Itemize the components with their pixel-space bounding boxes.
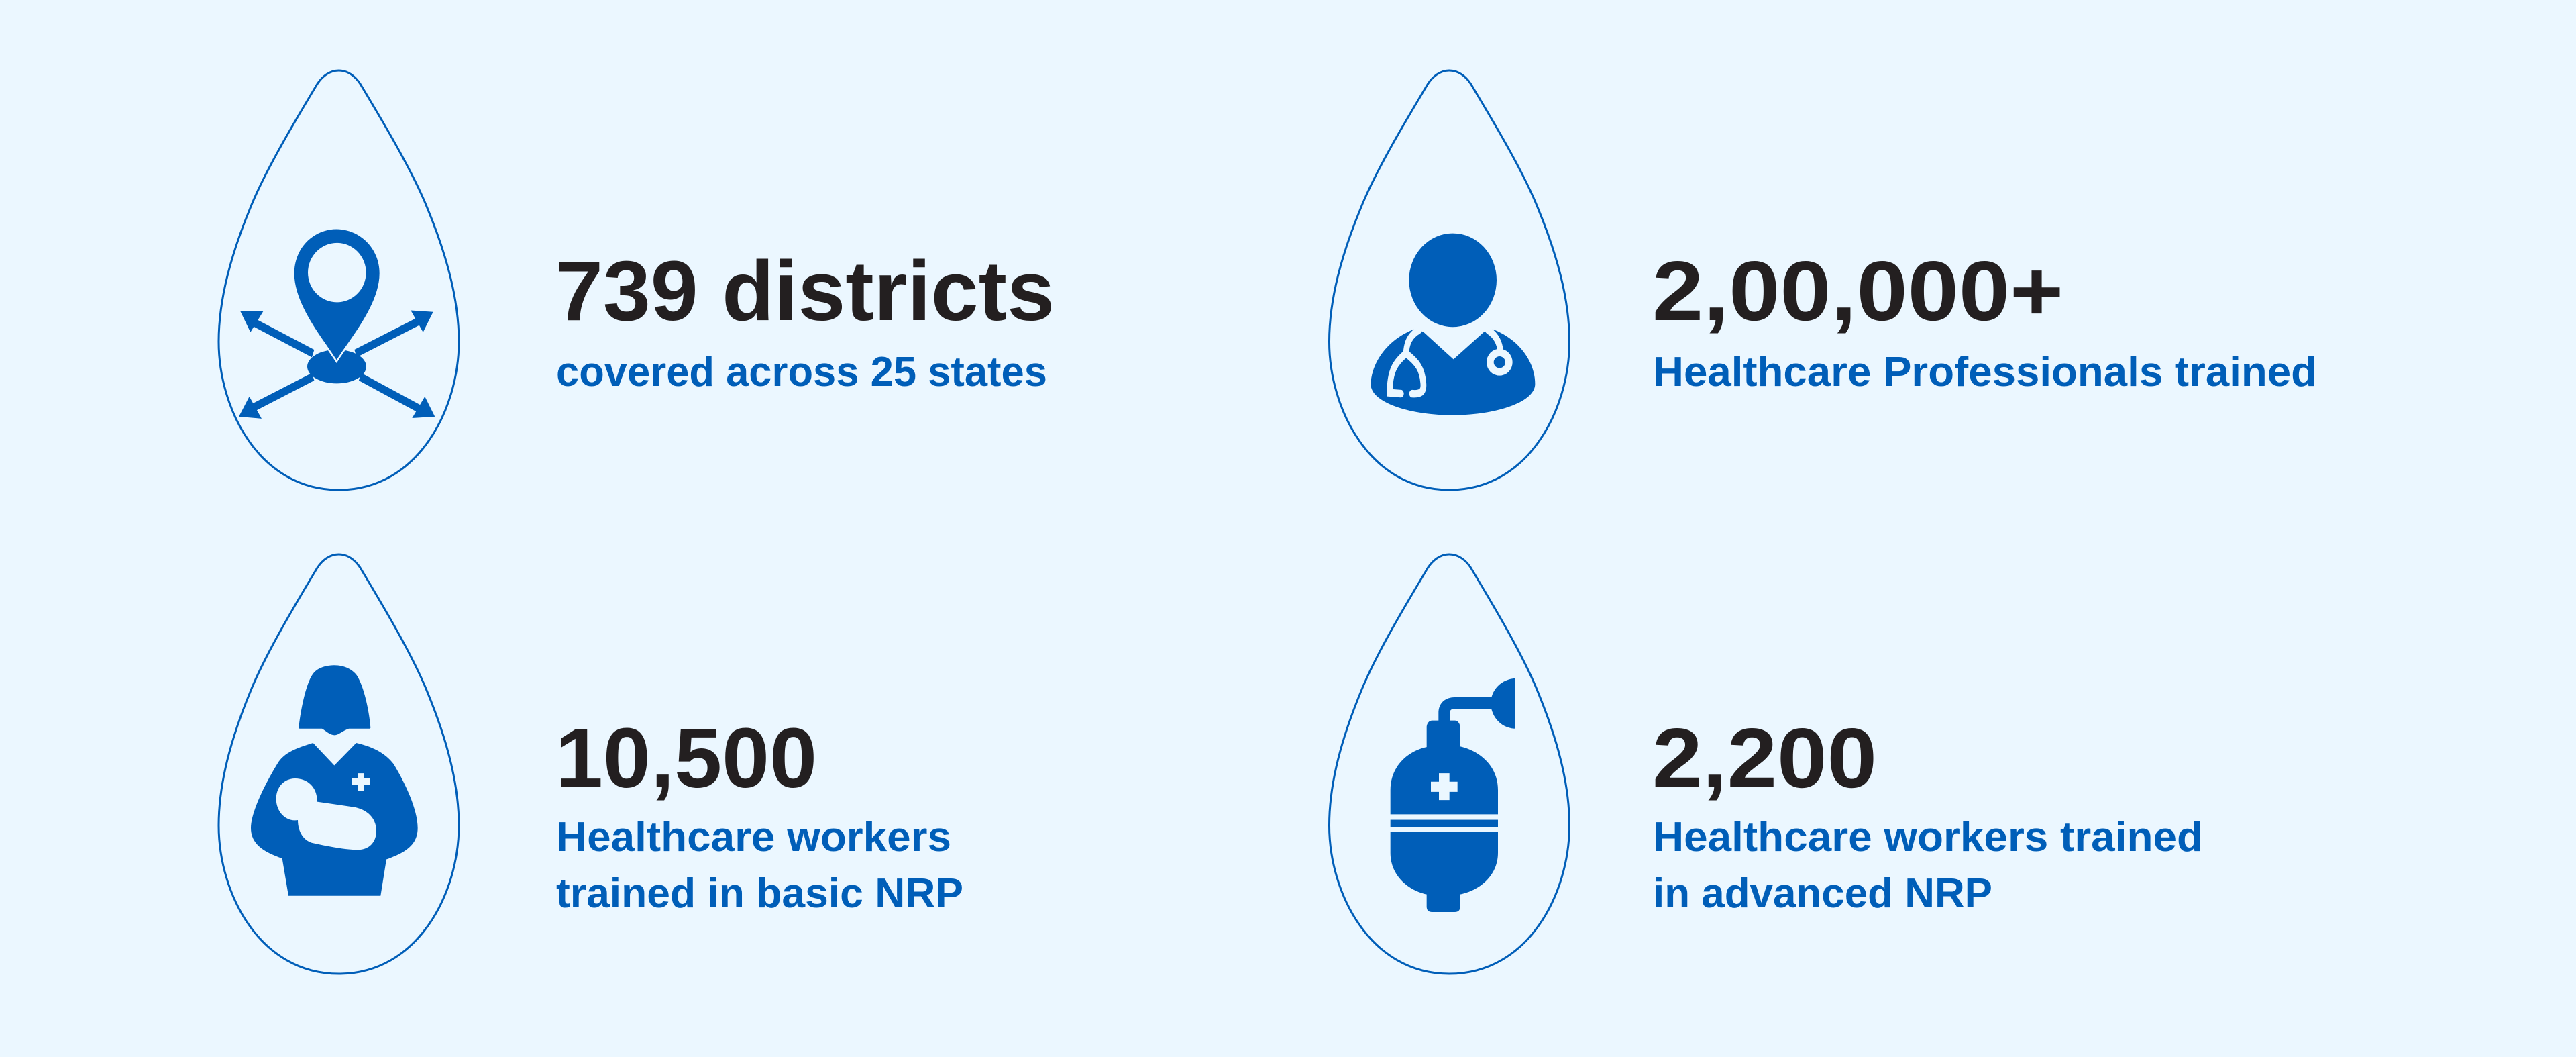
- heading: 2,00,000+: 2,00,000+: [1652, 244, 2063, 338]
- panel: advanced NRP: [1330, 554, 2203, 974]
- heading: 739 districts: 739 districts: [555, 244, 1055, 338]
- text: Healthcare workers trained in basic NRP: trained in basic NRP: [556, 870, 963, 917]
- panel: districts: [219, 70, 1055, 490]
- text: Healthcare Professionals trained: Healthcare Professionals trained: [1653, 349, 2317, 395]
- text: Healthcare workers trained in basic NRP: Healthcare workers: [556, 814, 951, 860]
- icon: resuscitation bag: [1391, 678, 1515, 912]
- drop outline: basic NRP: [219, 554, 459, 974]
- text: Healthcare workers trained in advanced NRP: in advanced NRP: [1653, 870, 1992, 917]
- panel: healthcare professionals: [1330, 70, 2317, 490]
- icon: doctor with stethoscope: [1371, 234, 1535, 415]
- drop outline: professionals: [1330, 70, 1570, 490]
- icon: nurse holding baby: [251, 665, 418, 896]
- text: Healthcare workers trained in advanced NRP: [1653, 814, 2203, 917]
- drop outline: districts: [219, 70, 459, 490]
- text: Healthcare workers trained in advanced NRP: Healthcare workers trained: [1653, 814, 2203, 860]
- text: covered across 25 states: covered across 25 states: [556, 349, 1047, 395]
- drop outline: advanced NRP: [1330, 554, 1570, 974]
- heading: 2,200: 2,200: [1652, 711, 1877, 805]
- text: Healthcare workers trained in basic NRP: [556, 814, 963, 917]
- panel: basic NRP: [219, 554, 963, 974]
- icon: map pin with arrows: [239, 230, 435, 419]
- heading: 10,500: 10,500: [555, 711, 817, 805]
